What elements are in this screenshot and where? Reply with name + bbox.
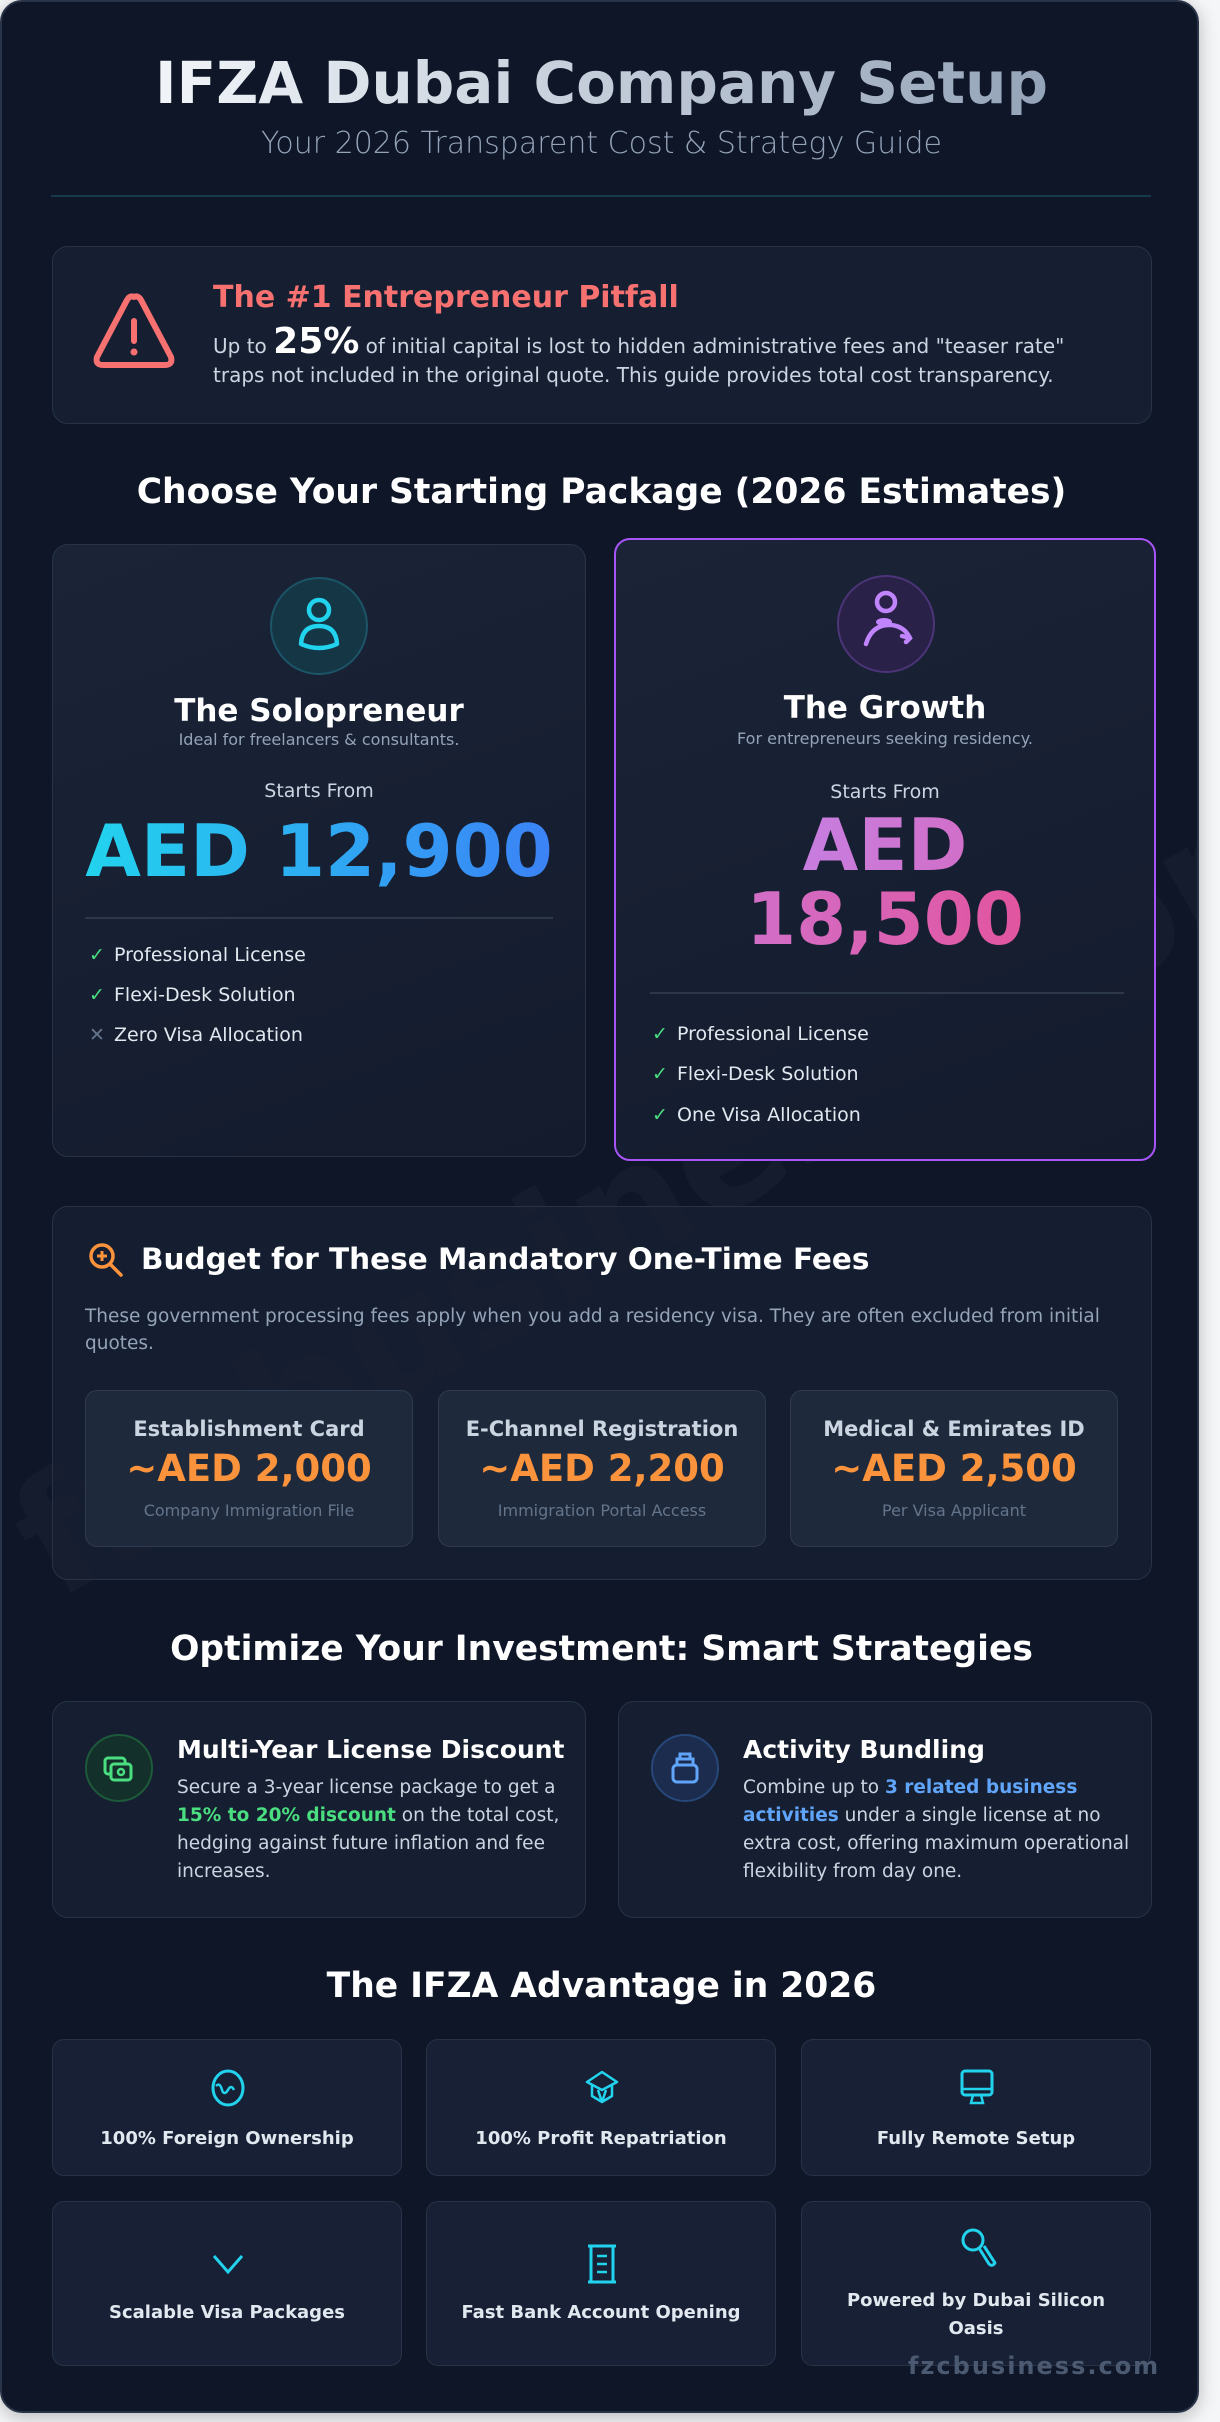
heading: Budget for These Mandatory One-Time Fees xyxy=(141,1242,869,1276)
card: visa packages xyxy=(52,2201,402,2366)
icon: magnifier xyxy=(89,1243,123,1277)
heading: strategies: Optimize Your Investment: Smart Strategies xyxy=(170,1629,1033,1669)
text block: Up to 25% of initial capital is lost to hidden administrative fees and "teaser rate" traps not included in the original quote. This guide provides total cost transparency. xyxy=(213,321,1064,387)
text block: Combine up to 3 related business activities under a single license at no extra cost, offering maximum operational flexibility from day one. xyxy=(743,1777,1129,1882)
icon: money xyxy=(85,1734,153,1802)
title: Activity Bundling xyxy=(743,1735,985,1764)
plan title: The Solopreneur xyxy=(174,693,464,729)
heading: advantage: The IFZA Advantage in 2026 xyxy=(327,1966,876,2006)
feature list: Zero Visa Allocation xyxy=(114,1024,303,1046)
feature list: One Visa Allocation xyxy=(677,1104,861,1126)
price: AED 12,900 xyxy=(85,809,553,893)
feature list: Flexi-Desk Solution xyxy=(677,1063,859,1085)
feature list: Flexi-Desk Solution xyxy=(114,984,296,1006)
feature list: ✓ xyxy=(89,944,105,966)
heading: The #1 Entrepreneur Pitfall xyxy=(213,280,679,315)
feature list xyxy=(652,1023,869,1126)
card: foreign ownership xyxy=(52,2039,402,2176)
panel: multi-year discount xyxy=(52,1701,586,1918)
panel: solopreneur: Starts From xyxy=(264,780,374,802)
card: profit repatriation: 100% Profit Repatriation xyxy=(475,2128,727,2149)
fee: e-channel: E-Channel Registration xyxy=(466,1417,738,1441)
card: bank account: Fast Bank Account Opening xyxy=(461,2302,741,2323)
fee: medical xyxy=(790,1390,1118,1547)
panel: growth: For entrepreneurs seeking residency. xyxy=(737,729,1033,748)
icon: person xyxy=(270,577,368,675)
panel: growth: Starts From xyxy=(830,781,940,803)
title: IFZA Dubai Company Setup xyxy=(155,49,1048,117)
price: 18,500 xyxy=(746,877,1024,961)
icon: key xyxy=(962,2228,996,2267)
price xyxy=(746,803,1024,961)
card: foreign ownership: 100% Foreign Ownership xyxy=(100,2128,354,2149)
subtitle: Your 2026 Transparent Cost & Strategy Guide xyxy=(261,126,942,161)
card: remote setup: Fully Remote Setup xyxy=(877,2128,1075,2149)
card: remote setup xyxy=(801,2039,1151,2176)
card: profit repatriation xyxy=(426,2039,776,2176)
panel: growth xyxy=(614,538,1156,1161)
icon: bundle xyxy=(651,1734,719,1802)
panel: solopreneur xyxy=(52,544,586,1157)
icon: document xyxy=(588,2244,616,2284)
fee: e-channel: ~AED 2,200 xyxy=(479,1447,725,1490)
fee: medical: Medical & Emirates ID xyxy=(823,1417,1085,1441)
icon: globe xyxy=(212,2070,244,2106)
fee: e-channel: Immigration Portal Access xyxy=(498,1501,706,1520)
card: bank account xyxy=(426,2201,776,2366)
panel: solopreneur: Ideal for freelancers & consultants. xyxy=(179,730,459,749)
feature list: Professional License xyxy=(677,1023,869,1045)
icon: chevron xyxy=(213,2255,243,2274)
card: silicon oasis xyxy=(801,2201,1151,2366)
feature list: ✓ xyxy=(652,1063,668,1085)
fee: establishment card: Company Immigration File xyxy=(144,1501,354,1520)
plan title: The Growth xyxy=(784,690,986,726)
icon: person purple xyxy=(837,575,935,673)
card: visa packages: Scalable Visa Packages xyxy=(109,2302,345,2323)
feature list: ✓ xyxy=(652,1023,668,1045)
feature list xyxy=(89,944,306,1046)
panel: mandatory fees xyxy=(52,1206,1152,1580)
icon: warning triangle xyxy=(94,293,174,368)
feature list: ✓ xyxy=(89,984,105,1006)
price: AED xyxy=(803,803,967,887)
icon: cap xyxy=(586,2070,618,2104)
panel: pitfall warning xyxy=(52,246,1152,424)
feature list: Professional License xyxy=(114,944,306,966)
description: These government processing fees apply when you add a residency visa. They are often excluded from initial quotes. xyxy=(85,1306,1100,1354)
fee: medical: Per Visa Applicant xyxy=(882,1501,1026,1520)
fee: establishment card: ~AED 2,000 xyxy=(126,1447,372,1490)
fee: establishment card xyxy=(85,1390,413,1547)
fee: e-channel xyxy=(438,1390,766,1547)
fee: medical: ~AED 2,500 xyxy=(831,1447,1077,1490)
title: Multi-Year License Discount xyxy=(177,1735,564,1764)
text block: Secure a 3-year license package to get a 15% to 20% discount on the total cost, hedging against future inflation and fee increases. xyxy=(177,1777,559,1882)
footer brand: fzcbusiness.com xyxy=(908,2352,1160,2380)
feature list: ✓ xyxy=(652,1104,668,1126)
icon: monitor xyxy=(960,2070,994,2104)
card: silicon oasis: Powered by Dubai Silicon Oasis xyxy=(847,2290,1105,2339)
feature list: ✕ xyxy=(89,1024,105,1046)
heading: packages: Choose Your Starting Package (2026 Estimates) xyxy=(137,472,1066,512)
fee: establishment card: Establishment Card xyxy=(133,1417,365,1441)
panel: activity bundling xyxy=(618,1701,1152,1918)
